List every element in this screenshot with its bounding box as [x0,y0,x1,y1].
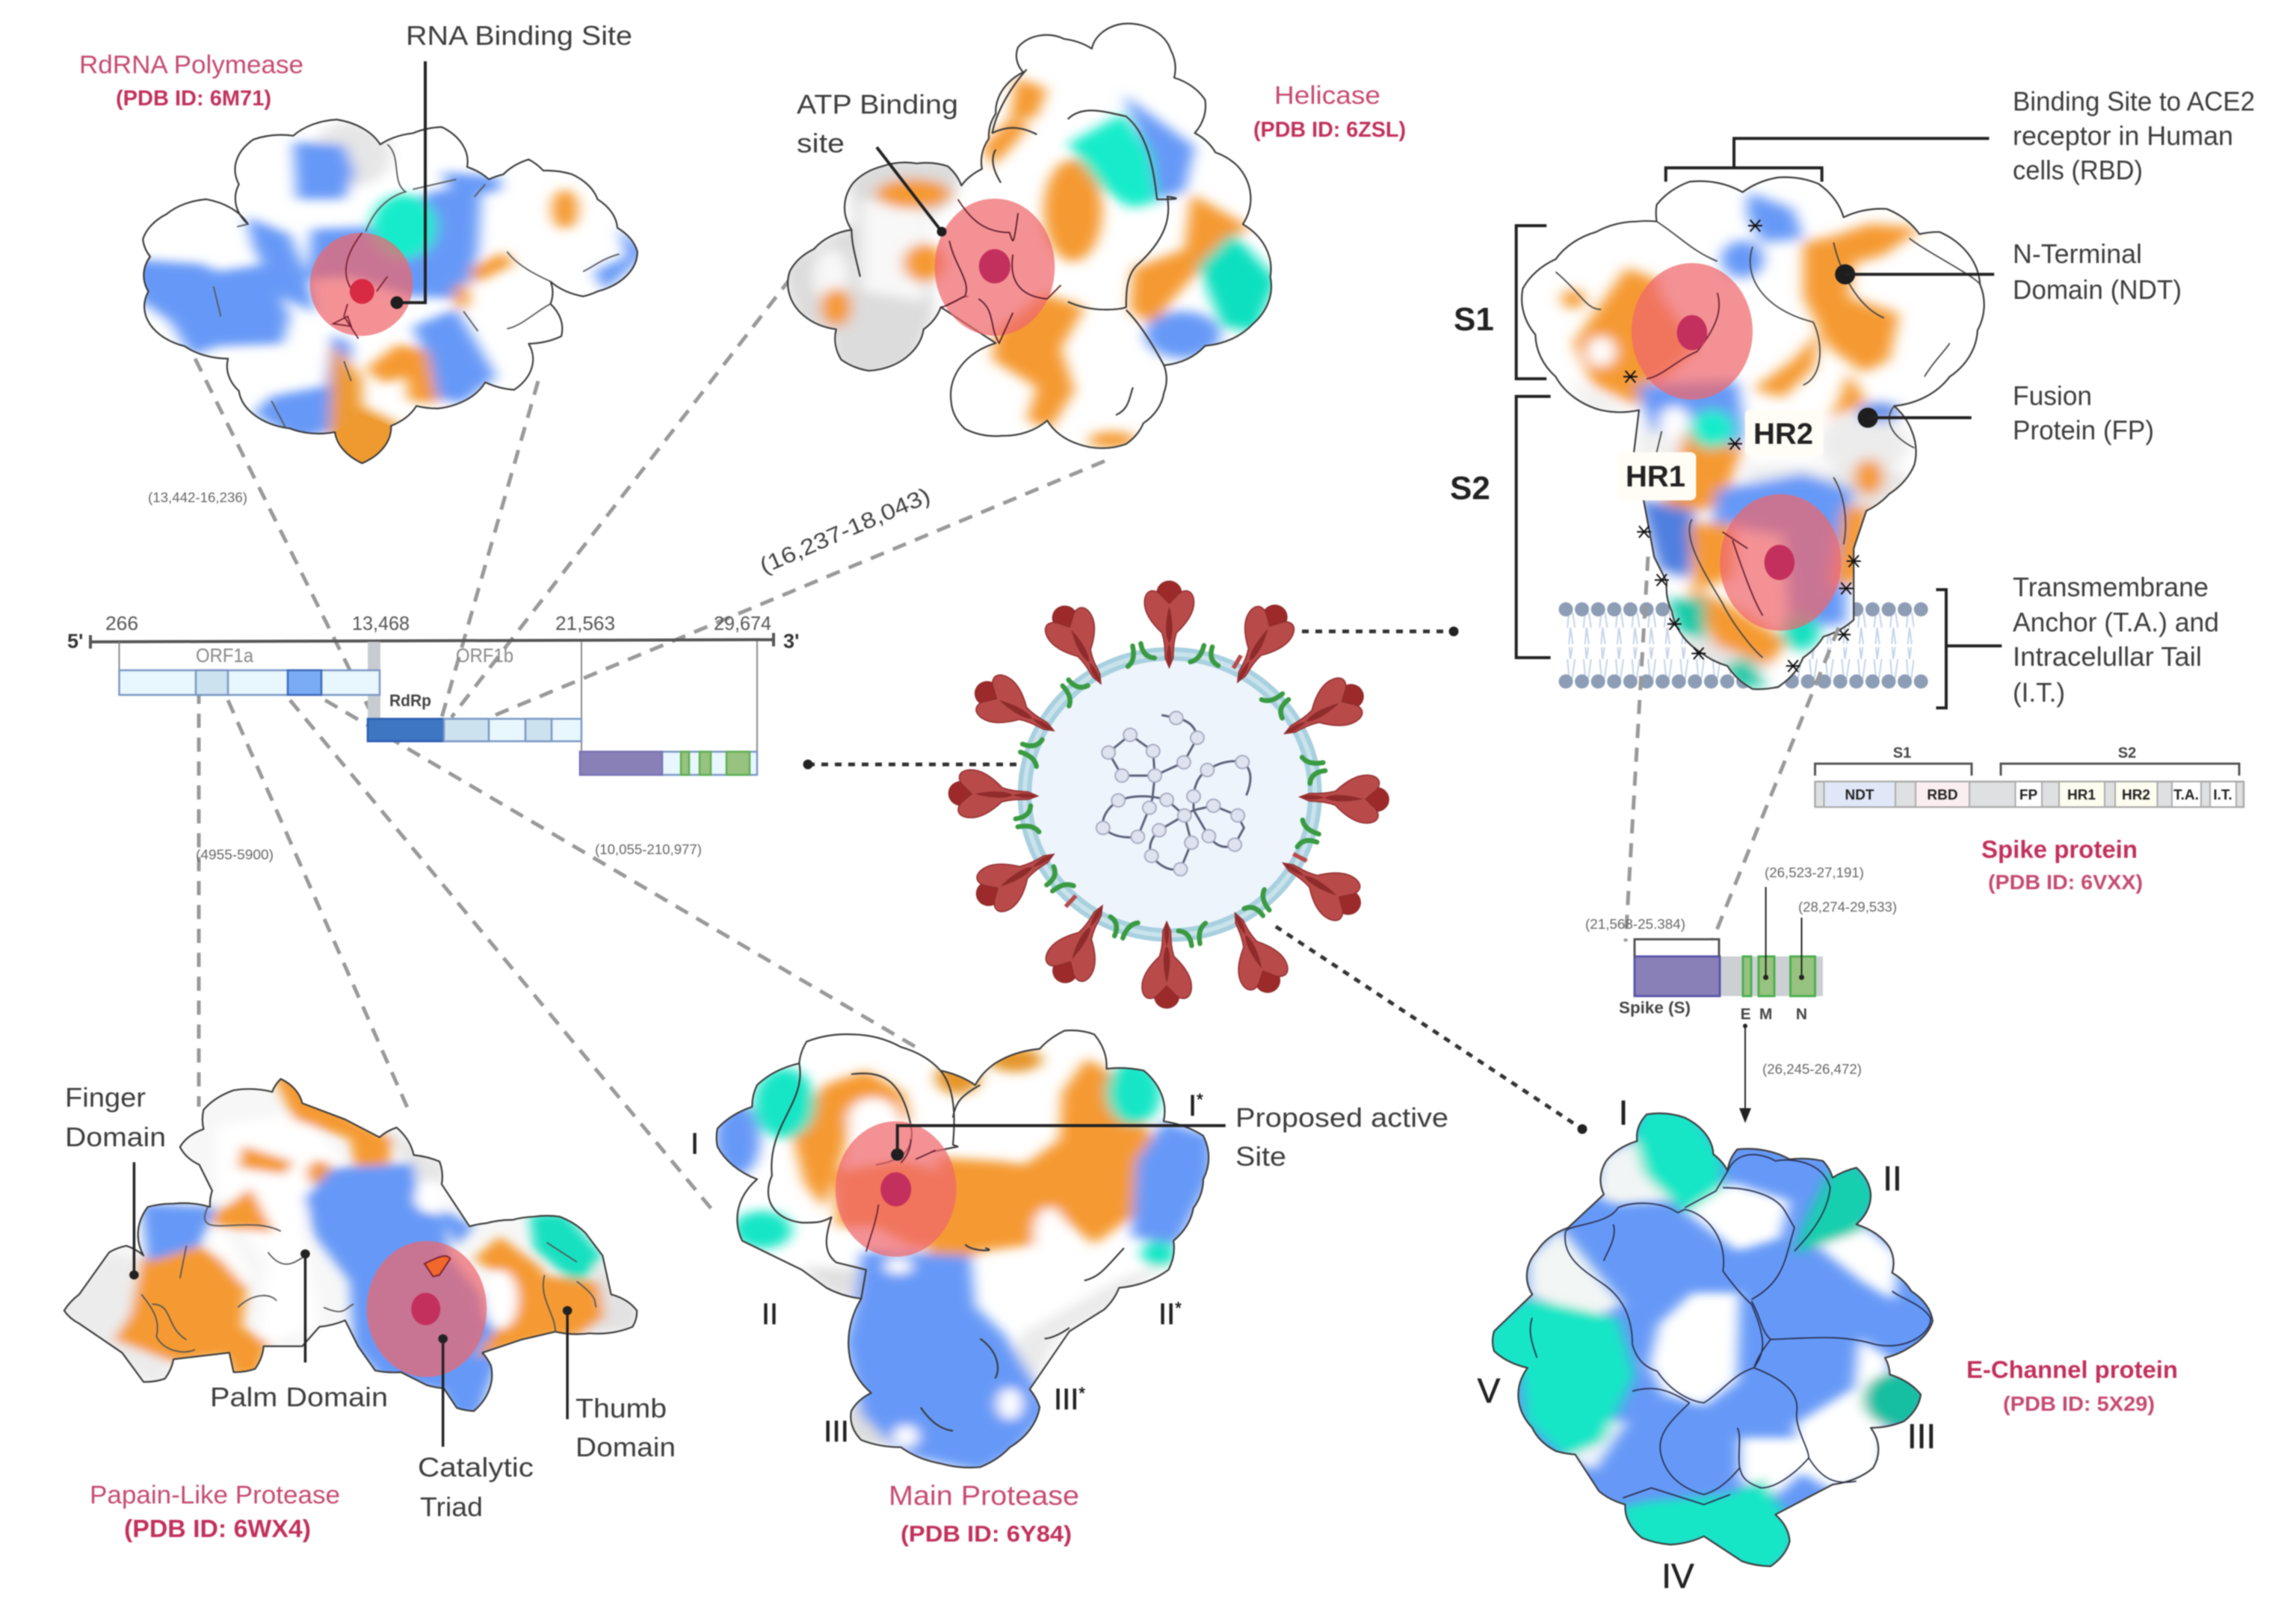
Mpro labels [691,1089,1448,1448]
PLpro labels: Catalytic [418,1452,534,1483]
active site highlight [310,233,413,336]
dotted connectors [803,626,1587,1134]
title: helicase: Helicase [1274,81,1380,110]
genome axis [90,633,774,649]
Mpro labels: II [1158,1298,1175,1331]
title: papain-like protease: (PDB ID: 6WX4) [124,1515,311,1542]
panel: virus particle [948,581,1389,1008]
ATP site marker [979,249,1010,283]
Mpro colour surface [715,1048,1213,1473]
envelope [1025,654,1315,935]
spike dashed lines [1626,557,1839,942]
ATP callout: ATP Binding [797,89,958,120]
spike domain chart [1815,745,2244,807]
ATP site highlight [935,199,1055,336]
title: spike protein [1981,835,2143,894]
S1 S2 labels: S1 [1893,745,1911,761]
active site marker [350,279,374,304]
spike text labels: receptor in Human [2013,120,2233,151]
domain names: T.A. [2173,788,2199,803]
S1 S2 labels [1893,745,2136,761]
spike segment [1635,956,1720,996]
spike text labels [1450,86,2255,708]
E-channel labels [1478,1093,1936,1595]
spike text labels: Anchor (T.A.) and [2013,607,2219,637]
mini map coordinates: (21,568-25.384) [1585,917,1685,932]
spike proteins [948,581,1389,1008]
title: RdRNA polymerase: RdRNA Polymease [79,51,303,79]
E-channel labels: I [1619,1093,1628,1132]
leader dots [1739,974,1804,1123]
mini map coordinates [1585,865,1897,1077]
title: RdRNA polymerase: (PDB ID: 6M71) [116,87,271,111]
mini bar [1635,956,1823,996]
title: helicase [1253,81,1406,142]
coordinate labels: (4955-5900) [196,847,274,862]
domain segments [1824,782,2236,807]
active site marker [880,1172,911,1206]
polymerase sharp teal and orange tips [335,413,391,463]
Mpro labels: * [1197,1090,1203,1109]
spike colour surface [1561,192,1922,687]
genome numbers: 5' [67,630,83,652]
envelope inner line [1025,654,1315,935]
Mpro labels: I [1188,1089,1197,1122]
mini map gene labels: N [1796,1006,1807,1023]
PLpro inner contours [141,1207,596,1352]
Mpro leader [898,1125,1226,1154]
genome numbers [67,612,799,667]
spike text labels: Fusion [2013,380,2092,411]
title: E-channel protein: E-Channel protein [1966,1356,2178,1383]
spike text labels: Intracelullar Tail [2013,641,2202,672]
mini map gene labels [1619,998,1807,1023]
spike text labels: (I.T.) [2013,677,2065,708]
Mpro labels: III [824,1415,849,1448]
genome numbers: ORF1a [196,644,253,667]
ATP callout: site [797,128,845,158]
polymerase callout: RNA Binding Site [406,20,632,51]
coordinate labels: (13,442-16,236) [148,490,247,505]
polymerase colour surface [130,122,648,471]
envelope proteins [1064,655,1308,908]
S1 fold highlight [1632,263,1753,400]
RNA strand [1096,711,1250,876]
PLpro labels: Triad [420,1491,483,1522]
domain names [1845,788,2232,803]
mini map gene labels: M [1759,1006,1772,1023]
S1 S2 brackets [1815,764,2239,776]
panel: spike membrane [1566,610,1922,681]
domain bar [1815,782,2244,807]
PLpro colour surface [53,1074,641,1418]
HR1 label [1617,452,1696,501]
Mpro inner contours [768,1063,1124,1431]
mini map coordinates: (26,245-26,472) [1762,1062,1862,1077]
Mpro labels: * [1078,1384,1085,1403]
spike leader lines and brackets [1516,138,2002,708]
mini map gene labels: Spike (S) [1619,998,1691,1017]
Mpro labels: Proposed active [1235,1102,1448,1133]
Mpro labels: I [691,1128,699,1160]
genome guide lines [120,641,757,752]
E M N segments [1743,956,1815,996]
dashed connector lines [195,278,1105,1214]
PLpro labels: Domain [65,1122,166,1152]
Mpro labels: II [762,1298,778,1331]
S1 marker [1677,315,1707,350]
PLpro leader lines [134,1162,567,1447]
helicase inner contours [851,69,1176,415]
genome map [67,612,799,775]
Mpro labels: * [1175,1299,1182,1317]
spike text labels: HR1 [1626,460,1685,493]
S1 S2 labels: S2 [2118,745,2136,761]
active site lines [333,233,387,338]
genome numbers: 13,468 [352,612,410,634]
spike text labels: Transmembrane [2013,572,2209,602]
title: helicase: (PDB ID: 6ZSL) [1253,118,1406,142]
spike text labels: Protein (FP) [2013,415,2154,445]
Mpro labels: Site [1235,1141,1286,1172]
E-channel labels: II [1883,1159,1902,1198]
spike text labels: N-Terminal [2013,238,2142,269]
FP dot [1858,408,1878,428]
E-channel lobe contours [1531,1154,1931,1505]
gap band [368,642,380,719]
Mpro labels: III [1054,1383,1078,1416]
domain names: NDT [1845,788,1874,803]
PLpro leader dots [129,1249,572,1344]
spike glycans [1623,220,1861,672]
catalytic site marker [411,1293,440,1325]
title: main protease: (PDB ID: 6Y84) [901,1521,1072,1547]
title: papain-like protease: Papain-Like Protease [90,1481,340,1509]
E-channel colour surface [1484,1107,1926,1573]
ATP callout [797,89,958,236]
title: spike protein: Spike protein [1981,835,2138,863]
panel: spike protein [1516,138,2002,708]
title: papain-like protease [90,1481,340,1542]
PLpro labels: Finger [65,1082,146,1113]
coordinate labels: (16,237-18,043) [756,483,934,578]
spike text labels: S2 [1450,470,1490,507]
PLpro labels: Thumb [575,1393,667,1423]
helicase colour surface [780,78,1277,448]
genome numbers: ORF1b [456,644,513,667]
PLpro labels [65,1082,676,1522]
highlight contours [1647,293,1763,616]
ATP site contours [941,200,1061,343]
mini map coordinates: (26,523-27,191) [1765,865,1864,880]
E-channel labels: V [1478,1371,1501,1410]
S2 marker [1765,545,1794,580]
title: spike protein: (PDB ID: 6VXX) [1988,871,2143,894]
mini map coordinates: (28,274-29,533) [1798,900,1897,915]
PLpro labels: Domain [575,1432,676,1462]
polymerase callout [390,20,632,309]
Mpro dot [891,1148,904,1160]
domain names: I.T. [2213,788,2232,803]
HR2 label [1745,409,1824,457]
active site contours [866,1140,936,1252]
membrane proteins [1013,641,1327,947]
PLpro labels: Palm Domain [210,1382,388,1412]
title: main protease [889,1480,1079,1547]
coordinate labels [148,483,934,862]
spike text labels: Binding Site to ACE2 [2013,86,2255,117]
coordinate labels: (10,055-210,977) [595,842,702,857]
active site highlight [836,1122,957,1257]
ORF1a bar [120,670,380,695]
spike text labels: S1 [1454,301,1494,338]
genome numbers: 21,563 [555,612,615,634]
RdRp label: RdRp [389,691,431,710]
S2 fold highlight [1720,494,1841,631]
genome numbers: 266 [105,612,138,634]
catalytic site highlight [366,1241,487,1377]
mini map leaders [1635,939,1719,956]
structural genome mini map [1585,865,1897,1123]
spike text labels: HR2 [1753,418,1813,451]
title: RdRNA polymerase [79,51,303,111]
E-channel labels: IV [1661,1556,1694,1595]
genome numbers: 3' [783,630,799,652]
structural genes bar [580,752,757,775]
panel: E-channel protein [1484,1107,1933,1573]
domain names: RBD [1927,788,1958,803]
domain names: HR1 [2067,788,2096,803]
spike text labels: Domain (NDT) [2013,274,2182,305]
E-channel labels: III [1907,1417,1936,1456]
panel: main protease [715,1030,1226,1473]
title: E-channel protein: (PDB ID: 5X29) [2003,1392,2155,1415]
title: E-channel protein [1966,1356,2178,1415]
title: main protease: Main Protease [889,1480,1079,1511]
spike text labels: cells (RBD) [2013,155,2143,185]
NDT dot [1835,265,1855,285]
panel: RdRNA polymerase [130,120,648,471]
panel: papain-like protease [53,1074,641,1447]
ORF1b bar [368,719,581,741]
mini map gene labels: E [1741,1006,1751,1023]
genome numbers: 29,674 [714,612,771,634]
domain names: FP [2019,788,2037,803]
spike inner contours [1555,221,1980,658]
polymerase inner contours [214,144,620,428]
panel: helicase [780,24,1277,448]
domain names: HR2 [2122,788,2150,803]
catalytic site orange pocket [425,1256,450,1276]
